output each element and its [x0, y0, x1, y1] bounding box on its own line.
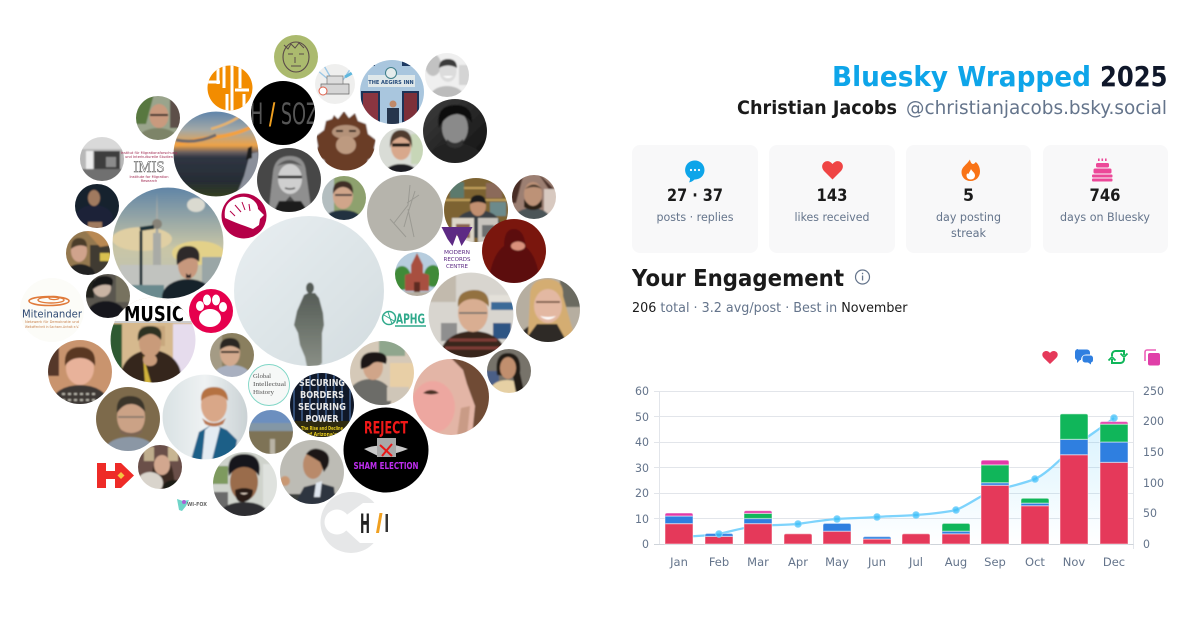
logo: H/S ring mark	[320, 492, 392, 553]
legend icon: likes	[1042, 351, 1058, 364]
avatar: Securing Borders book cover: POWER	[306, 414, 339, 425]
avatar: pub front: THE AEGIRS INN	[368, 80, 414, 86]
avatar: man with glasses and light shirt	[210, 333, 254, 377]
cumulative points	[716, 415, 1117, 537]
bars: May	[823, 523, 851, 544]
stat card: posts and replies: posts · replies	[656, 210, 734, 224]
right axis labels	[1143, 384, 1164, 551]
right axis labels: 150	[1143, 445, 1164, 459]
title: Bluesky Wrapped 2025: Bluesky Wrapped	[832, 61, 1091, 93]
logo: Wi-Fox: WI-FOX	[187, 502, 208, 508]
avatar: bearded man	[512, 175, 556, 219]
legend icon: replies	[1075, 349, 1093, 364]
avatar: MUSIC poster man pointing: MUSIC	[124, 302, 184, 326]
avatar: man with stubble and glasses	[96, 387, 160, 451]
stat card: day posting streak: 5	[963, 186, 974, 206]
avatar: H/SOZ logo: H / SOZ	[250, 97, 318, 131]
avatar: Reject Sham Election: REJECT	[364, 418, 408, 438]
display name and handle: @christianjacobs.bsky.social	[906, 98, 1167, 119]
avatar cluster	[20, 33, 581, 553]
avatar: man with books	[443, 177, 509, 243]
right axis labels: 0	[1143, 537, 1150, 551]
stat card: likes received: 143	[816, 186, 848, 206]
avatar: blonde woman smiling	[516, 278, 580, 342]
avatar: Securing Borders book cover: BORDERS	[300, 390, 344, 401]
stat card: posts and replies	[632, 145, 758, 253]
right axis labels: 50	[1143, 506, 1157, 520]
avatar: laurel head logo	[222, 194, 266, 238]
bars: Mar	[744, 511, 772, 544]
avatar: close-up of woman's face	[411, 358, 490, 436]
stat card: days on Bluesky	[1043, 145, 1168, 253]
logo: Miteinander: Weltoffenheit in Sachsen-Anhalt e.V.	[25, 325, 79, 329]
avatar: IMIS logo: IMIS	[134, 159, 164, 176]
bars: Sep	[981, 460, 1009, 544]
month labels: Nov	[1063, 555, 1085, 569]
icon: info	[856, 270, 870, 284]
avatar: dark curly haired man	[423, 99, 487, 163]
logo: Modern Records Centre: CENTRE	[446, 264, 469, 270]
logo: Wi-Fox	[177, 499, 208, 511]
logo: Modern Records Centre	[442, 227, 472, 270]
avatar: Securing Borders book cover: The Rise and Decline	[301, 426, 343, 432]
bars: Nov	[1060, 414, 1088, 544]
left axis labels: 20	[635, 486, 649, 500]
left axis labels: 60	[635, 384, 649, 398]
heading: Your Engagement: Your Engagement	[631, 266, 844, 292]
right axis labels: 100	[1143, 476, 1164, 490]
bars: Dec	[1100, 422, 1128, 544]
avatar: building sketch	[314, 63, 356, 105]
display name and handle	[737, 98, 1167, 119]
avatar: dark portrait of woman	[86, 274, 130, 318]
avatar: man with glasses in room	[66, 231, 110, 275]
avatar: IMIS logo	[121, 151, 177, 183]
stat card: posts and replies: 27 · 37	[667, 186, 723, 206]
avatar: Reject Sham Election	[343, 407, 429, 493]
month labels: Sep	[984, 555, 1006, 569]
avatar: Securing Borders book cover: SECURING	[298, 402, 346, 413]
logo: Global Intellectual History: Intellectual	[253, 381, 286, 388]
avatar: smiling man with curly hair	[212, 451, 278, 526]
icon: birthday cake	[1092, 158, 1112, 182]
bars	[665, 414, 1128, 544]
month labels: May	[825, 555, 849, 569]
avatar: Securing Borders book cover	[289, 372, 355, 438]
avatar: red brick church	[395, 252, 439, 296]
avatar: man in suit in profile	[279, 439, 345, 505]
legend icon: quotes	[1145, 350, 1160, 366]
engagement summary: 206 total · 3.2 avg/post · Best in November	[632, 301, 908, 316]
stacked bar chart with cumulative line	[635, 384, 1164, 569]
avatar: woman with dark glasses	[379, 128, 423, 172]
left axis labels: 40	[635, 435, 649, 449]
left axis labels: 50	[635, 410, 649, 424]
avatar: pub front	[359, 59, 425, 125]
avatar: Reject Sham Election: SHAM ELECTION	[354, 461, 418, 472]
avatar: H/SOZ logo	[250, 80, 318, 146]
month labels: Dec	[1103, 555, 1125, 569]
avatar: orange HP logo	[208, 66, 252, 110]
right axis labels: 250	[1143, 384, 1164, 398]
avatar: IMIS logo: Institut für Migrationsforschung	[121, 151, 177, 155]
logo: Miteinander	[20, 278, 84, 342]
avatar: woman glasses monochrome	[256, 147, 322, 213]
bars: Jul	[902, 534, 930, 544]
title: Bluesky Wrapped 2025: 2025	[1100, 61, 1168, 93]
bars: Apr	[784, 534, 812, 544]
month labels	[669, 555, 1125, 569]
logo: Miteinander: Miteinander	[22, 308, 82, 320]
avatar: Securing Borders book cover: of Arizona's	[307, 432, 337, 438]
avatar: red paw logo	[189, 289, 233, 333]
avatar: man in blue jacket	[162, 374, 248, 460]
logo: Global Intellectual History	[248, 364, 290, 406]
left axis labels	[635, 384, 649, 551]
month labels: Mar	[747, 555, 769, 569]
avatar: green sketch face	[274, 35, 318, 79]
bars: Jun	[863, 537, 891, 544]
right axis labels: 200	[1143, 414, 1164, 428]
bars: Feb	[705, 534, 733, 544]
left axis labels: 0	[642, 537, 649, 551]
stat card: likes received	[769, 145, 895, 253]
avatar: dark red figure	[481, 218, 547, 284]
month labels: Aug	[945, 555, 967, 569]
avatar: archive photo, monochrome	[80, 137, 124, 181]
month labels: Jan	[669, 555, 688, 569]
avatar: statue against pale sky	[233, 215, 385, 367]
cumulative area and line	[679, 418, 1114, 544]
avatar: young man in patterned sweater	[48, 340, 112, 404]
logo: Modern Records Centre: MODERN	[444, 250, 470, 256]
icon: speech bubble	[685, 160, 704, 182]
avatar: woman in cream sweater	[487, 349, 531, 393]
stat card: days on Bluesky: 746	[1090, 186, 1120, 206]
left axis labels: 30	[635, 461, 649, 475]
avatar: woman with dog	[136, 443, 187, 494]
left axis labels: 10	[635, 512, 649, 526]
icon: flame	[962, 160, 980, 181]
legend icon: reposts	[1108, 351, 1128, 363]
avatar: plush monkey	[316, 112, 376, 170]
month labels: Feb	[709, 555, 729, 569]
logo: H/S ring mark: H	[360, 509, 370, 540]
avatar: smiling man with glasses	[322, 176, 366, 220]
bars: Jan	[665, 513, 693, 544]
avatar: beach landscape	[249, 410, 293, 454]
grid lines	[654, 391, 1134, 549]
logo: APHG	[382, 312, 426, 328]
logo: Global Intellectual History: History	[253, 389, 275, 396]
avatar: smiling man, monochrome	[425, 53, 469, 97]
avatar: bald man glasses	[136, 96, 180, 140]
avatar: IMIS logo: Institute for Migration	[129, 175, 169, 179]
display name and handle: Christian Jacobs	[737, 98, 897, 119]
stat card: likes received: likes received	[794, 210, 870, 224]
avatar: young man at table	[350, 341, 414, 405]
month labels: Jun	[867, 555, 886, 569]
avatar: man under TV tower	[112, 188, 224, 298]
logo: APHG: APHG	[396, 312, 425, 328]
avatar: man in plaid shirt	[428, 272, 514, 358]
avatar: man in dark jacket	[75, 184, 119, 228]
avatar: IMIS logo: Research	[141, 179, 157, 183]
logo: Miteinander: Netzwerk für Demokratie und	[25, 320, 79, 324]
month labels: Apr	[788, 555, 808, 569]
icon: heart	[822, 161, 843, 180]
avatar: MUSIC poster man pointing	[110, 298, 196, 382]
logo: red H arrow	[97, 463, 134, 488]
avatar: sunset over hills	[173, 111, 261, 197]
month labels: Oct	[1025, 555, 1045, 569]
stat card: day posting streak: streak	[951, 226, 986, 240]
bars: Aug	[942, 523, 970, 544]
avatar: Securing Borders book cover: SECURING	[299, 378, 345, 389]
logo: Global Intellectual History: Global	[253, 373, 271, 380]
bars: Oct	[1021, 498, 1049, 544]
stat card: day posting streak: day posting	[936, 210, 1001, 224]
stat card: day posting streak	[906, 145, 1031, 253]
stat card: days on Bluesky: days on Bluesky	[1060, 210, 1150, 224]
chart legend	[1042, 349, 1160, 366]
avatar: pencil sketch on grey	[366, 174, 444, 252]
month labels: Jul	[908, 555, 923, 569]
logo: Modern Records Centre: RECORDS	[444, 257, 471, 263]
avatar: IMIS logo: und Interkulturelle Studien	[125, 155, 173, 159]
